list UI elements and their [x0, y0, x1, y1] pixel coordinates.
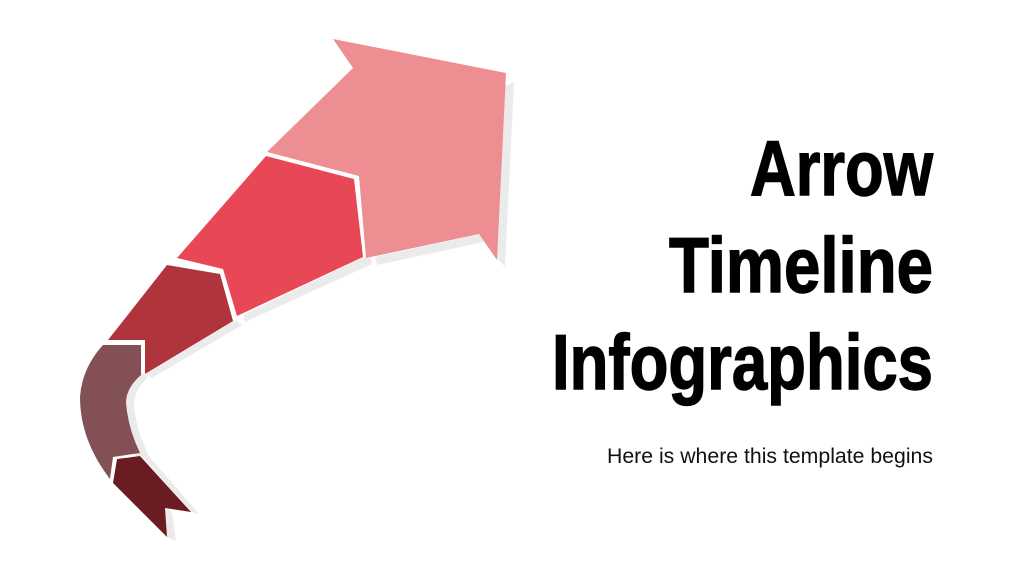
subtitle: Here is where this template begins: [607, 445, 933, 468]
arrow timeline graphic: [80, 39, 514, 541]
segment 4: red: [177, 156, 363, 316]
title: [552, 124, 933, 406]
title line: Timeline: Timeline: [669, 221, 933, 309]
title line: Infographics: Infographics: [552, 318, 933, 406]
title line: Arrow: Arrow: [750, 124, 933, 212]
segment 2: curved mauve: [80, 345, 141, 479]
segment 3: dark red: [108, 265, 233, 374]
segment 1: ribbon tail: [113, 456, 191, 537]
arrow drop shadow: [120, 82, 514, 541]
segment 5: arrow head: [267, 39, 506, 260]
